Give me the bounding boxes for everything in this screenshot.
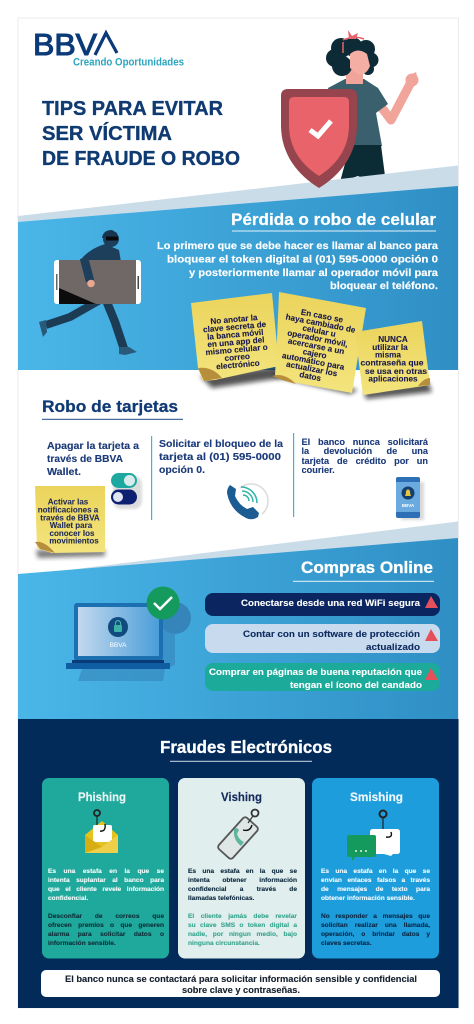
section background: Pérdida o robo de celular — [18, 166, 458, 370]
callout: WiFi segura: Conectarse desde una red WiFi segura — [241, 598, 421, 609]
sticky note: cambio de celular — [272, 292, 366, 394]
title: SER VÍCTIMA — [42, 122, 172, 145]
callout: software de protección: actualizado — [366, 642, 420, 653]
text block: phishing description: ofrecen premios o que generen — [48, 922, 164, 929]
text block: solicitar el bloqueo: Solicitar el bloqueo de la — [159, 439, 283, 450]
text block: apagar la tarjeta: través de BBVA — [47, 454, 123, 465]
sticky note: nunca utilizar la misma contraseña: se usa en otras — [365, 367, 427, 376]
text block: apagar la tarjeta: Wallet. — [47, 467, 81, 478]
sticky note: nunca utilizar la misma contraseña: aplicaciones — [368, 374, 418, 384]
text block: phishing description: Desconfiar de correos que — [48, 913, 164, 920]
sticky note: no anotar la clave: clave secreta de — [203, 320, 267, 334]
callout: WiFi segura — [205, 593, 440, 616]
callout: el banco nunca se contactará: sobre clave y contraseñas. — [182, 985, 300, 996]
text block: first steps: y posteriormente llamar al operador móvil para — [189, 268, 438, 279]
text block: vishing description: su clave SMS o token digital a — [188, 922, 297, 929]
icon: phishing envelope — [85, 810, 118, 853]
sticky note: activar las notificaciones: conocer los — [50, 529, 95, 538]
text block: smishing description: de mensajes de texto para — [321, 886, 430, 893]
sticky note: no anotar la clave: correo — [224, 352, 250, 363]
text block: vishing description: confidencial a través de — [188, 886, 297, 893]
callout: software de protección — [205, 624, 440, 653]
heading: Robo de tarjetas: Robo de tarjetas — [42, 398, 178, 416]
header logo: BBVA Creando Oportunidades: Creando Oportunidades — [73, 56, 184, 68]
text block: vishing description: nadie, por ningun medio, bajo — [188, 931, 297, 938]
sticky note: activar las notificaciones: Wallet para — [50, 521, 93, 530]
sticky note: no anotar la clave: electrónico — [216, 359, 260, 371]
text block: first steps: bloquear el teléfono. — [330, 281, 438, 292]
callout: el banco nunca se contactará: El banco nunca se contactará para solicitar información sensible y confidencial — [65, 974, 417, 985]
sticky note: cambio de celular: automático para — [281, 351, 346, 372]
panel: Vishing — [178, 778, 305, 958]
sticky note: cambio de celular: acercarse a un — [287, 336, 345, 356]
icon: mobile with bell — [396, 477, 424, 520]
text block: vishing description: intenta obtener información — [188, 877, 297, 884]
callout: software de protección: Contar con un software de protección — [243, 629, 420, 640]
text block: vishing description — [188, 868, 297, 947]
text block: first steps — [157, 241, 439, 292]
sticky note: nunca utilizar la misma contraseña: misma — [375, 350, 401, 360]
callout: buena reputación: tengan el ícono del candado — [290, 680, 422, 691]
sticky note: activar las notificaciones — [35, 486, 105, 558]
sticky note: activar las notificaciones: notificaciones a — [38, 506, 99, 514]
text block: apagar la tarjeta: Apagar la tarjeta a — [47, 441, 139, 452]
text block: phishing description: confidencial. — [48, 895, 88, 902]
panel: Vishing: Vishing — [221, 790, 262, 804]
panel: Smishing — [312, 778, 439, 958]
callout: buena reputación: Comprar en páginas de buena reputación que — [209, 667, 422, 678]
illustration: woman — [326, 30, 418, 182]
title: DE FRAUDE O ROBO — [42, 147, 240, 170]
text block: smishing description: solicitan realizar una llamada, — [321, 922, 430, 929]
sticky note: cambio de celular: operador móvil, — [287, 328, 349, 349]
sticky note: nunca utilizar la misma contraseña: NUNCA — [378, 335, 408, 344]
text block: solicitar el bloqueo: opción 0. — [159, 465, 205, 476]
illustration: thief carrying phone — [39, 230, 141, 355]
panel: Phishing: Phishing — [78, 790, 126, 804]
text block: vishing description: ninguna circunstancia. — [188, 940, 260, 947]
sticky note: nunca utilizar la misma contraseña — [355, 321, 432, 399]
text block: first steps: Lo primero que se debe hacer es llamar al banco para — [157, 241, 438, 252]
illustration: laptop with check — [66, 586, 191, 681]
sticky note: no anotar la clave: en una app del — [207, 335, 265, 349]
heading: Fraudes Electrónicos: Fraudes Electrónicos — [160, 737, 332, 757]
heading: Pérdida o robo de celular: Pérdida o robo de celular — [231, 210, 436, 229]
text block: apagar la tarjeta — [47, 441, 139, 478]
sticky note: activar las notificaciones: movimientos — [49, 536, 99, 546]
text block: phishing description: Es una estafa en la que se — [48, 868, 164, 875]
panel: Phishing — [42, 778, 169, 958]
title: TIPS PARA EVITAR — [42, 97, 223, 120]
text block: smishing description: claves secretas. — [321, 940, 372, 947]
sticky note: no anotar la clave: mismo celular o — [205, 343, 268, 357]
text block: phishing description: alarma para solicitar datos o — [48, 931, 164, 938]
title — [42, 97, 240, 170]
sticky note: cambio de celular: En caso se — [300, 308, 344, 325]
callout: buena reputación — [205, 663, 440, 691]
illustration: laptop with check: BBVA — [110, 642, 127, 649]
icon: shield with check — [281, 89, 357, 188]
text block: smishing description: Es una estafa en la que se — [321, 868, 430, 875]
sticky note: cambio de celular: celular u — [302, 324, 336, 339]
header logo: BBVA Creando Oportunidades — [33, 27, 184, 68]
text block: smishing description: obtener información sensible. — [321, 895, 415, 902]
text block: smishing description — [321, 868, 430, 947]
section background: Compras Online — [18, 522, 458, 719]
sticky note: nunca utilizar la misma contraseña: contraseña que — [360, 358, 424, 368]
text block: smishing description: envían enlaces falsos a través — [321, 877, 430, 884]
sticky note: cambio de celular: cajero — [302, 347, 327, 361]
section background: Fraudes Electrónicos — [18, 719, 458, 1008]
text block: vishing description: Es una estafa en la que se — [188, 868, 297, 875]
heading: Compras Online: Compras Online — [301, 558, 433, 577]
text block: solicitar el bloqueo — [159, 439, 283, 476]
callout: el banco nunca se contactará — [41, 970, 440, 997]
icon: toggles — [111, 473, 142, 509]
sticky note: nunca utilizar la misma contraseña: utilizar la — [372, 343, 408, 352]
sticky note: cambio de celular: actualizar los — [285, 360, 338, 378]
sticky note: activar las notificaciones: través de BBVA — [40, 514, 100, 522]
text block: smishing description: operación, o brindar datos y — [321, 931, 430, 938]
text block: phishing description: intenta suplantar al banco para — [48, 877, 164, 884]
text block: phishing description — [48, 868, 164, 947]
text block: banco nunca solicitará devolución — [302, 438, 428, 475]
text block: smishing description: No responder a mensajes que — [321, 913, 430, 920]
sticky note: cambio de celular: haya cambiado de — [285, 312, 357, 335]
sticky note: no anotar la clave — [191, 293, 282, 388]
text block: solicitar el bloqueo: tarjeta al (01) 595-0000 — [159, 452, 282, 463]
text block: phishing description: que el cliente revele información — [48, 886, 164, 893]
icon: vishing phone — [217, 810, 259, 860]
icon: telephone with signal — [227, 484, 268, 519]
header logo: BBVA Creando Oportunidades: BBV — [33, 27, 97, 62]
sticky note: activar las notificaciones: Activar las — [48, 498, 89, 506]
text block: vishing description: llamadas telefónicas. — [188, 895, 254, 902]
sticky note: no anotar la clave: la banca móvil — [207, 328, 264, 342]
text block: phishing description: información sensible. — [48, 940, 116, 947]
sticky note: cambio de celular: datos — [299, 370, 322, 383]
text block: vishing description: El cliente jamás debe revelar — [188, 913, 297, 920]
panel: Smishing: Smishing — [350, 790, 403, 804]
icon: mobile with bell: BBVA — [402, 503, 415, 508]
icon: smishing chat bubbles — [347, 810, 400, 861]
text block: first steps: bloquear el token digital al (01) 595-0000 opción 0 — [167, 254, 439, 266]
sticky note: no anotar la clave: No anotar la — [210, 313, 258, 326]
